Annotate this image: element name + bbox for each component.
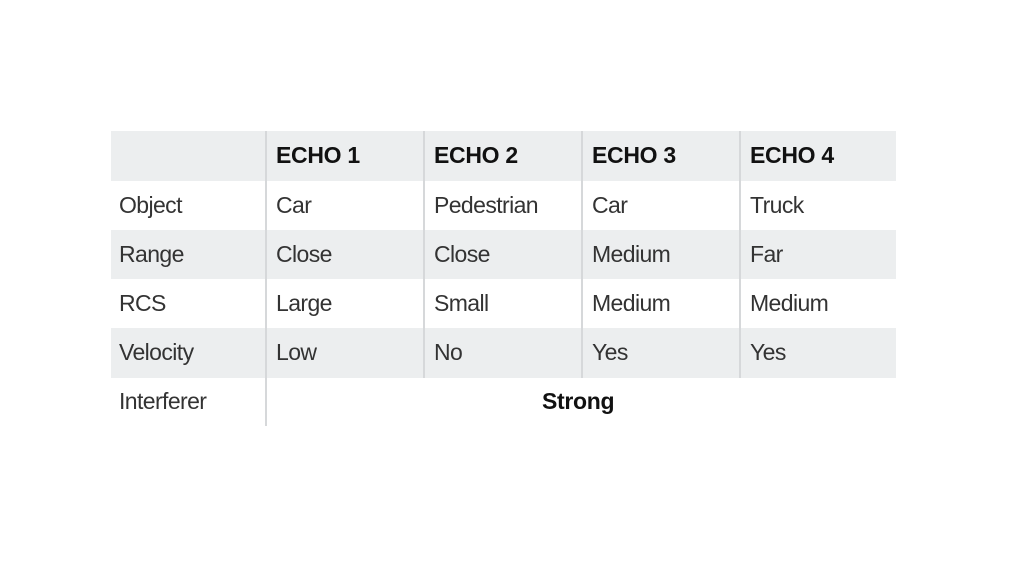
row: rcs: Medium — [592, 290, 670, 316]
row: interferer: Interferer — [119, 388, 206, 414]
row: range: Range — [119, 241, 184, 267]
row: object: Car — [592, 192, 627, 218]
row: velocity — [119, 339, 786, 365]
row: range: Far — [750, 241, 783, 267]
row: velocity: Yes — [750, 339, 786, 365]
range row background — [111, 230, 896, 279]
row: rcs: Medium — [750, 290, 828, 316]
header labels: ECHO 3 — [592, 142, 676, 168]
row: velocity: Low — [276, 339, 316, 365]
row: velocity: No — [434, 339, 462, 365]
row: rcs: Small — [434, 290, 489, 316]
header labels: ECHO 4 — [750, 142, 834, 168]
header row — [111, 131, 896, 181]
header labels: ECHO 2 — [434, 142, 518, 168]
header labels: ECHO 1 — [276, 142, 360, 168]
row: velocity: Yes — [592, 339, 628, 365]
velocity row background — [111, 328, 896, 378]
row: rcs: RCS — [119, 290, 166, 316]
row: velocity: Velocity — [119, 339, 193, 365]
row: range: Close — [434, 241, 490, 267]
row: range — [119, 241, 783, 267]
row: object: Car — [276, 192, 311, 218]
header labels — [276, 142, 834, 168]
row: object — [119, 192, 804, 218]
row: range: Medium — [592, 241, 670, 267]
row: interferer: Strong — [542, 388, 614, 414]
row: object: Pedestrian — [434, 192, 538, 218]
row: rcs — [119, 290, 828, 316]
row: rcs: Large — [276, 290, 332, 316]
row: object: Truck — [750, 192, 804, 218]
row: object: Object — [119, 192, 182, 218]
row: range: Close — [276, 241, 332, 267]
row: interferer — [119, 388, 614, 414]
